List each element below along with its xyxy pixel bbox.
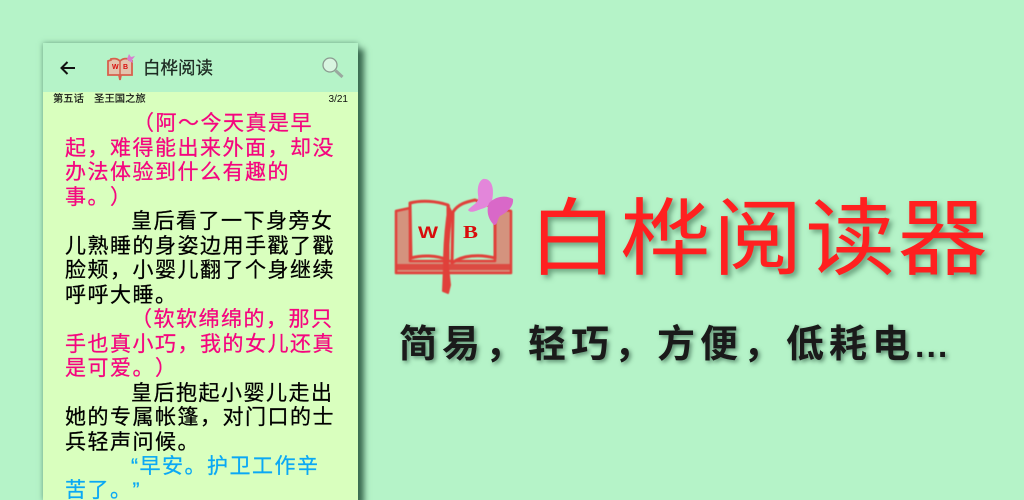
app title: 白桦阅读 [143, 58, 213, 78]
panel: phone reader screenshot [43, 43, 358, 500]
reading text: 是可爱。） [65, 357, 178, 380]
icon: search magnifier [322, 57, 344, 78]
reading text: 皇后看了一下身旁女 [131, 210, 334, 233]
reading text: 兵轻声问候。 [65, 430, 200, 454]
reading text: 儿熟睡的身姿边用手戳了戳 [65, 234, 335, 258]
reading text: 她的专属帐篷，对门口的士 [65, 406, 335, 429]
page number: 3/21 [329, 94, 348, 105]
reading text: 脸颊，小婴儿翻了个身继续 [65, 259, 335, 282]
reading text: 手也真小巧，我的女儿还真 [65, 332, 335, 356]
icon: small book logo: W [112, 64, 119, 71]
reading text: 皇后抱起小婴儿走出 [131, 382, 334, 404]
reading text: “早安。护卫工作辛 [131, 455, 320, 478]
icon: back arrow [60, 61, 75, 75]
tagline: 简易，轻巧，方便，低耗电... [399, 324, 949, 366]
icon: open book with butterfly logo [394, 178, 514, 295]
reading text: 事。） [65, 186, 132, 208]
icon: small book logo: B [123, 64, 128, 71]
main title: 白桦阅读器 [528, 192, 990, 286]
B letter: B [463, 222, 478, 242]
reading text: 起，难得能出来外面，却没 [65, 136, 335, 160]
reading text: 办法体验到什么有趣的 [65, 161, 290, 184]
reading text [65, 112, 335, 500]
butterfly [468, 179, 513, 225]
app bar [43, 43, 358, 92]
reading text: （阿～今天真是早 [133, 112, 313, 135]
reading text: （软软绵绵的，那只 [131, 308, 334, 331]
W letter: W [418, 223, 439, 242]
icon: small book logo [107, 54, 135, 80]
reading text: 呼呼大睡。 [65, 284, 178, 306]
chapter header: 第五话 圣王国之旅 [53, 94, 146, 105]
